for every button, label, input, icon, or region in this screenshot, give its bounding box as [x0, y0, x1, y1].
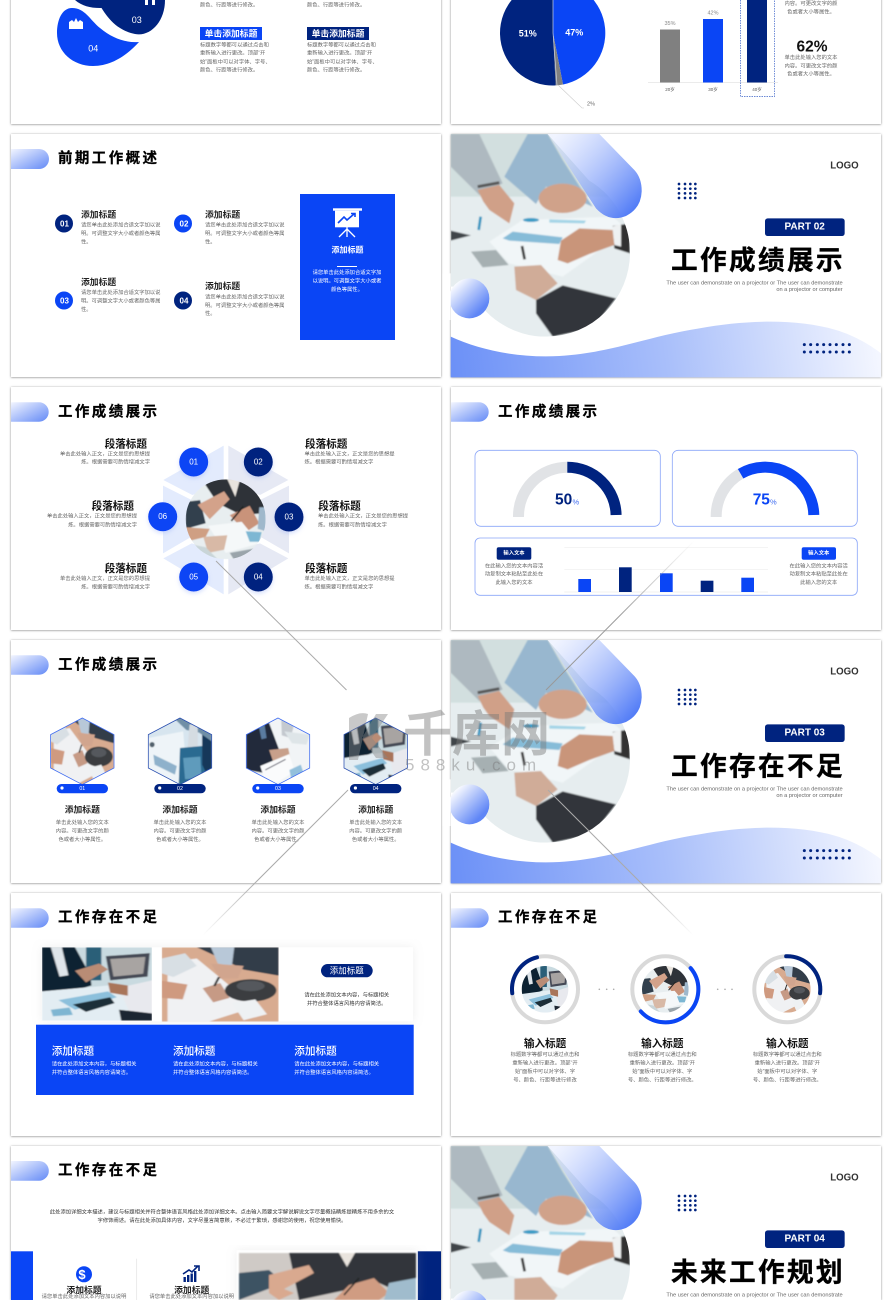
- text block: dark title: [307, 27, 378, 73]
- blue callout panel: 颜色等属性。: [331, 285, 363, 293]
- ring 1: 号、颜色、行距等进行修改: [513, 1075, 577, 1083]
- blue band: 并符合整体语言风格内容请简洁。: [294, 1068, 374, 1076]
- card 03: 单击此处输入您的文本: [252, 818, 305, 826]
- icon: growth chart: [183, 1266, 199, 1282]
- heading: 工作存在不足: [58, 1161, 159, 1179]
- right label: 动复制文本粘贴至此处在: [790, 570, 848, 578]
- bar chart: [648, 0, 778, 96]
- mini bar chart: [564, 547, 768, 592]
- text 01: 段落标题: [105, 437, 147, 450]
- card 03: 内容。可更改文字的颜: [252, 827, 305, 835]
- card 02: 色或者大小等属性。: [156, 835, 204, 843]
- bar chart: 20岁: [665, 86, 675, 93]
- ring 1: 输入标题: [524, 1037, 567, 1050]
- section artwork and text: on a projector or computer: [776, 793, 843, 799]
- text fragments above: 颜色、行距等进行修改。: [200, 0, 258, 8]
- text fragments above: [200, 0, 365, 8]
- text 05: 炼。根据需要可酌情增减文字: [81, 583, 150, 591]
- panel: slide overview: [11, 134, 441, 377]
- item 04: 添加标题: [205, 280, 240, 291]
- text 05: [60, 562, 151, 591]
- left label: [485, 547, 544, 586]
- column: money: 请您单击此处添加文本内容加以说明: [42, 1292, 126, 1300]
- card 03: 色或者大小等属性。: [254, 835, 302, 843]
- item 02: 性。: [205, 238, 216, 246]
- ring 2: 重新输入进行更改。顶部“开: [630, 1059, 696, 1067]
- text 02: 炼。根据需要可酌情增减文字: [304, 458, 373, 466]
- number circles: 01: [189, 458, 199, 466]
- intro text: [50, 1207, 395, 1224]
- blue callout panel: 以说明。可调整文字大小或者: [313, 276, 381, 284]
- column: growth: 请您单击此处添加文本内容加以说明: [149, 1292, 234, 1300]
- item 03: 明。可调整文字大小或者颜色等属: [81, 296, 160, 304]
- center photo: [186, 479, 266, 559]
- watermark: 千库网: [403, 708, 550, 762]
- intro text: 字修饰阐述。请在此处添加具体内容，文字尽量言简意赅，不必过于繁琐，感谢您的使用，祝您使用愉快。: [98, 1216, 346, 1224]
- blob: 04: 04: [88, 44, 98, 54]
- photo 2: [162, 947, 279, 1022]
- ring 2: [628, 956, 698, 1083]
- item 02: 请您单击此处添加合适文字加以说: [205, 220, 285, 228]
- blue band: 请在此处添加文本内容，与标题相关: [173, 1059, 258, 1067]
- text 04: 单击此处输入正文，正文是您的思想提: [304, 574, 395, 582]
- text 02: 单击此处输入正文，正文是您的思想提: [304, 449, 395, 457]
- item 03: 请您单击此处添加合适文字加以说: [81, 288, 161, 296]
- icon: dollar globe: $: [78, 1267, 86, 1282]
- card 01: [51, 718, 114, 843]
- item 03: 03: [60, 296, 69, 306]
- bar chart: 35%: [664, 21, 676, 27]
- panel: slide blob list (top left): [11, 0, 441, 124]
- section artwork and text: LOGO: [830, 1172, 859, 1183]
- text block: dark title: 颜色、行距等进行修改。: [307, 65, 365, 73]
- card 01: 单击此处输入您的文本: [56, 818, 109, 826]
- section artwork and text: 工作存在不足: [671, 751, 845, 781]
- item 01: 请您单击此处添加合适文字加以说: [81, 220, 161, 228]
- blue band: 并符合整体语言风格内容请简洁。: [52, 1068, 131, 1076]
- framed photo: [237, 1250, 418, 1300]
- card 01: 色或者大小等属性。: [58, 835, 106, 843]
- panel: hexagon six items: [11, 387, 441, 630]
- divider: [136, 1259, 138, 1300]
- section artwork and text: [443, 130, 881, 377]
- item 03: 添加标题: [81, 276, 116, 287]
- item 04: 04: [180, 296, 189, 306]
- text 01: 炼。根据需要可酌情增减文字: [81, 458, 150, 466]
- card 02: 内容。可更改文字的颜: [154, 827, 207, 835]
- ring 2: 始”面板中可以对字体、字: [632, 1067, 692, 1075]
- card 04: [344, 718, 407, 843]
- card 01: 内容。可更改文字的颜: [56, 827, 109, 835]
- text 03: [318, 500, 409, 528]
- card 02: 添加标题: [162, 804, 198, 815]
- text block: dark title: 单击添加标题: [312, 28, 365, 39]
- ring 1: [511, 956, 579, 1083]
- section artwork and text: PART 02: [784, 221, 825, 232]
- panel: photos and blue band: [11, 893, 441, 1136]
- left label: 在此输入您的文本内容活: [485, 561, 544, 569]
- heading: [11, 402, 159, 422]
- number circles: 04: [254, 572, 263, 582]
- column: money: [42, 1266, 126, 1300]
- ring 2: 输入标题: [641, 1037, 684, 1050]
- text 05: 单击此处输入正文，正文是您的思想提: [60, 574, 151, 582]
- left label: 动复制文本粘贴至此处在: [485, 570, 543, 578]
- ring 1: 标题数字等都可以通过点击和: [511, 1050, 579, 1058]
- section artwork and text: on a projector or computer: [776, 287, 843, 293]
- bar chart: 42%: [707, 11, 719, 17]
- section artwork and text: The user can demonstrate on a projector or The user can demonstrate: [666, 1293, 843, 1299]
- section artwork and text: 工作成绩展示: [671, 245, 845, 275]
- card 03: 添加标题: [260, 804, 296, 815]
- section artwork and text: PART 03: [784, 727, 825, 738]
- card 03: [246, 718, 310, 843]
- text 03: 段落标题: [318, 500, 361, 513]
- ring 3: 号、颜色、行距等进行修改。: [753, 1075, 822, 1083]
- right label: [790, 547, 849, 586]
- heading: 工作存在不足: [498, 908, 599, 926]
- card 04: 04: [373, 786, 379, 792]
- hexagon petals: [163, 446, 289, 594]
- panel: description with side blocks: [11, 1146, 441, 1300]
- text 04: 段落标题: [305, 562, 348, 575]
- text 02: 段落标题: [305, 437, 348, 450]
- heading: [11, 149, 159, 169]
- watermark: 588ku.com: [405, 756, 542, 774]
- number circles: 06: [158, 512, 168, 521]
- blob: 04: [57, 8, 139, 66]
- text 01: [60, 437, 151, 466]
- column: growth: 添加标题: [174, 1284, 209, 1295]
- panel: three progress rings: [451, 893, 881, 1136]
- blob: 03: [97, 0, 165, 34]
- pie chart: 47%: [565, 28, 583, 38]
- right label: 此输入您的文本: [800, 578, 838, 586]
- item 01: 性。: [81, 238, 92, 246]
- item 02: 添加标题: [205, 208, 240, 220]
- panel: four hexagon photos: [11, 640, 441, 883]
- item 03: [55, 276, 161, 313]
- heading: [451, 402, 599, 422]
- side block dark: [418, 1251, 441, 1300]
- side block blue: [11, 1251, 33, 1300]
- heading: 工作成绩展示: [58, 656, 159, 674]
- ring 2: 标题数字等都可以通过点击和: [628, 1050, 697, 1058]
- card 01: 添加标题: [65, 804, 100, 815]
- number circles: 03: [285, 512, 294, 522]
- text 05: 段落标题: [105, 562, 147, 575]
- text block: blue title: 重新输入进行更改。顶部“开: [200, 49, 266, 57]
- stat text: 内容。可更改文字的颜: [785, 61, 838, 69]
- ring 1: 始”面板中可以对字体、字: [515, 1067, 575, 1075]
- text block: dark title: 标题数字等都可以通过点击和: [307, 40, 376, 48]
- card 04: 内容。可更改文字的颜: [349, 827, 403, 835]
- panel: section slide PART 03: [443, 636, 881, 883]
- item 02: 02: [180, 220, 189, 228]
- item 04: 明。可调整文字大小或者颜色等属: [205, 301, 284, 309]
- white text card: 并符合整体语言风格内容请简洁。: [307, 999, 386, 1007]
- bar chart: 30岁: [708, 86, 718, 93]
- card 02: 单击此处输入您的文本: [154, 818, 207, 826]
- text 06: [47, 500, 138, 528]
- card 02: 02: [177, 786, 183, 792]
- text 06: 段落标题: [92, 500, 134, 513]
- pie chart: 51%: [519, 28, 537, 38]
- ring 2: 号、颜色、行距等进行修改。: [628, 1075, 697, 1083]
- card 04: 色或者大小等属性。: [352, 835, 400, 843]
- ring 3: 标题数字等都可以通过点击和: [753, 1050, 822, 1058]
- blue callout panel: [300, 194, 395, 340]
- blue band: [36, 1025, 414, 1095]
- item 01: [55, 208, 161, 246]
- icon: presentation board: [333, 208, 362, 237]
- text block: blue title: 单击添加标题: [205, 28, 258, 39]
- section artwork and text: [443, 636, 881, 883]
- heading: [11, 655, 159, 675]
- panel: section slide PART 02: [443, 130, 881, 377]
- bar chart: 40岁: [752, 86, 762, 93]
- white text card: [42, 947, 413, 1021]
- card: gauge 75%: [672, 450, 857, 526]
- stat text: 色或者大小等属性。: [787, 70, 835, 78]
- section artwork and text: [446, 1142, 859, 1300]
- blue callout panel: 请您单击此处添加合适文字加: [313, 268, 381, 276]
- text 02: [304, 437, 395, 466]
- column: money: 添加标题: [66, 1284, 102, 1295]
- section artwork and text: 未来工作规划: [671, 1257, 845, 1287]
- left label: 输入文本: [503, 549, 525, 557]
- text block: blue title: [200, 27, 271, 73]
- ring 3: 输入标题: [766, 1037, 809, 1050]
- card: gauge 75%: 75: [753, 492, 770, 508]
- intro text: 此处添加详细文本描述，建议与标题相关并符合整体语言风格此处添加详细文本。点击输入简要文字解说解说文字尽量概括精炼提精炼不用多余的文: [50, 1207, 395, 1215]
- section artwork and text: PART 04: [784, 1233, 825, 1244]
- heading: 前期工作概述: [58, 149, 159, 167]
- blob: top segment: [75, 0, 123, 8]
- card: gauge 75%: %: [770, 498, 777, 506]
- text 01: 单击此处输入正文，正文是您的思想提: [60, 449, 151, 457]
- stat text: 62%: [796, 38, 828, 56]
- ring 1: 重新输入进行更改。顶部“开: [512, 1059, 578, 1067]
- blue band: 添加标题: [173, 1045, 216, 1058]
- watermark: [203, 541, 694, 935]
- section artwork and text: The user can demonstrate on a projector or The user can demonstrate: [666, 787, 843, 793]
- number circles: [148, 448, 304, 592]
- stat text: 单击此处输入您的文本: [785, 53, 838, 61]
- right label: 在此输入您的文本内容活: [790, 561, 849, 569]
- panel: gauges and bar chart: [451, 387, 881, 630]
- stat text: 内容。可更改文字的颜: [785, 0, 838, 7]
- heading: [11, 908, 159, 928]
- heading: 工作成绩展示: [58, 403, 159, 421]
- card 03: 03: [275, 786, 281, 792]
- item 04: 性。: [205, 309, 216, 317]
- card 04: 添加标题: [358, 804, 393, 815]
- pie chart: 2%: [587, 102, 595, 108]
- white text card: 添加标题: [330, 966, 364, 976]
- item 01: 添加标题: [81, 208, 116, 220]
- heading: [451, 908, 599, 928]
- column: growth: [149, 1266, 234, 1300]
- item 02: 明。可调整文字大小或者颜色等属: [205, 229, 284, 237]
- number circles: 02: [254, 458, 263, 466]
- heading: 工作成绩展示: [498, 403, 599, 421]
- ring 3: 重新输入进行更改。顶部“开: [755, 1059, 821, 1067]
- text 03: 炼。根据需要可酌情增减文字: [318, 520, 387, 528]
- section artwork and text: The user can demonstrate on a projector or The user can demonstrate: [666, 281, 843, 287]
- item 01: 明。可调整文字大小或者颜色等属: [81, 229, 160, 237]
- text 06: 单击此处输入正文，正文是您的思想提: [47, 512, 138, 520]
- card 01: 01: [79, 786, 85, 792]
- photo 1: [42, 947, 152, 1021]
- dots: [598, 988, 733, 990]
- watermark logo: [349, 713, 388, 760]
- text block: dark title: 始”面板中可以对字体、字号、: [307, 57, 378, 65]
- blue callout panel: 添加标题: [332, 244, 364, 254]
- stat text: 色或者大小等属性。: [787, 8, 835, 16]
- card: gauge 50%: %: [572, 498, 580, 506]
- text 06: 炼。根据需要可酌情增减文字: [68, 520, 137, 528]
- right label: 输入文本: [808, 549, 830, 557]
- text block: blue title: 始”面板中可以对字体、字号、: [200, 57, 271, 65]
- blob: 03: 03: [132, 15, 142, 25]
- section artwork and text: LOGO: [830, 160, 859, 171]
- heading: [11, 1161, 159, 1181]
- item 04: 请您单击此处添加合适文字加以说: [205, 292, 285, 300]
- item 02: [174, 208, 285, 246]
- left label: 此输入您的文本: [495, 578, 533, 586]
- stat text: [785, 0, 838, 78]
- panel: slide charts (top right): [451, 0, 881, 124]
- text 03: 单击此处输入正文，正文是您的思想提: [318, 512, 409, 520]
- text 04: 炼。根据需要可酌情增减文字: [304, 583, 373, 591]
- card 04: 单击此处输入您的文本: [349, 818, 403, 826]
- text block: blue title: 标题数字等都可以通过点击和: [200, 40, 269, 48]
- card: bars with text: [475, 538, 857, 595]
- card: gauge 50%: [475, 450, 660, 526]
- pie chart: [500, 0, 605, 108]
- blue band: 添加标题: [52, 1045, 94, 1058]
- text fragments above: 颜色、行距等进行修改。: [307, 0, 365, 8]
- text block: blue title: 颜色、行距等进行修改。: [200, 65, 258, 73]
- ring 3: [753, 956, 822, 1083]
- item 04: [174, 280, 285, 317]
- number circles: 05: [189, 572, 199, 582]
- item 03: 性。: [81, 305, 92, 313]
- blue band: 并符合整体语言风格内容请简洁。: [173, 1068, 252, 1076]
- item 01: 01: [60, 220, 69, 228]
- panel: section slide PART 04: [446, 1142, 881, 1300]
- text 04: [304, 562, 395, 591]
- card: gauge 50%: 50: [555, 492, 572, 508]
- section artwork and text: LOGO: [830, 666, 859, 677]
- ring 3: 始”面板中可以对字体、字: [757, 1067, 817, 1075]
- text block: dark title: 重新输入进行更改。顶部“开: [307, 49, 373, 57]
- blue band: 添加标题: [294, 1045, 337, 1058]
- heading: 工作存在不足: [58, 908, 159, 926]
- blue band: 请在此处添加文本内容，与标题相关: [52, 1059, 137, 1067]
- card 02: [148, 718, 212, 843]
- blue band: 请在此处添加文本内容，与标题相关: [294, 1059, 380, 1067]
- white text card: 请在此处添加文本内容，与标题相关: [304, 990, 390, 998]
